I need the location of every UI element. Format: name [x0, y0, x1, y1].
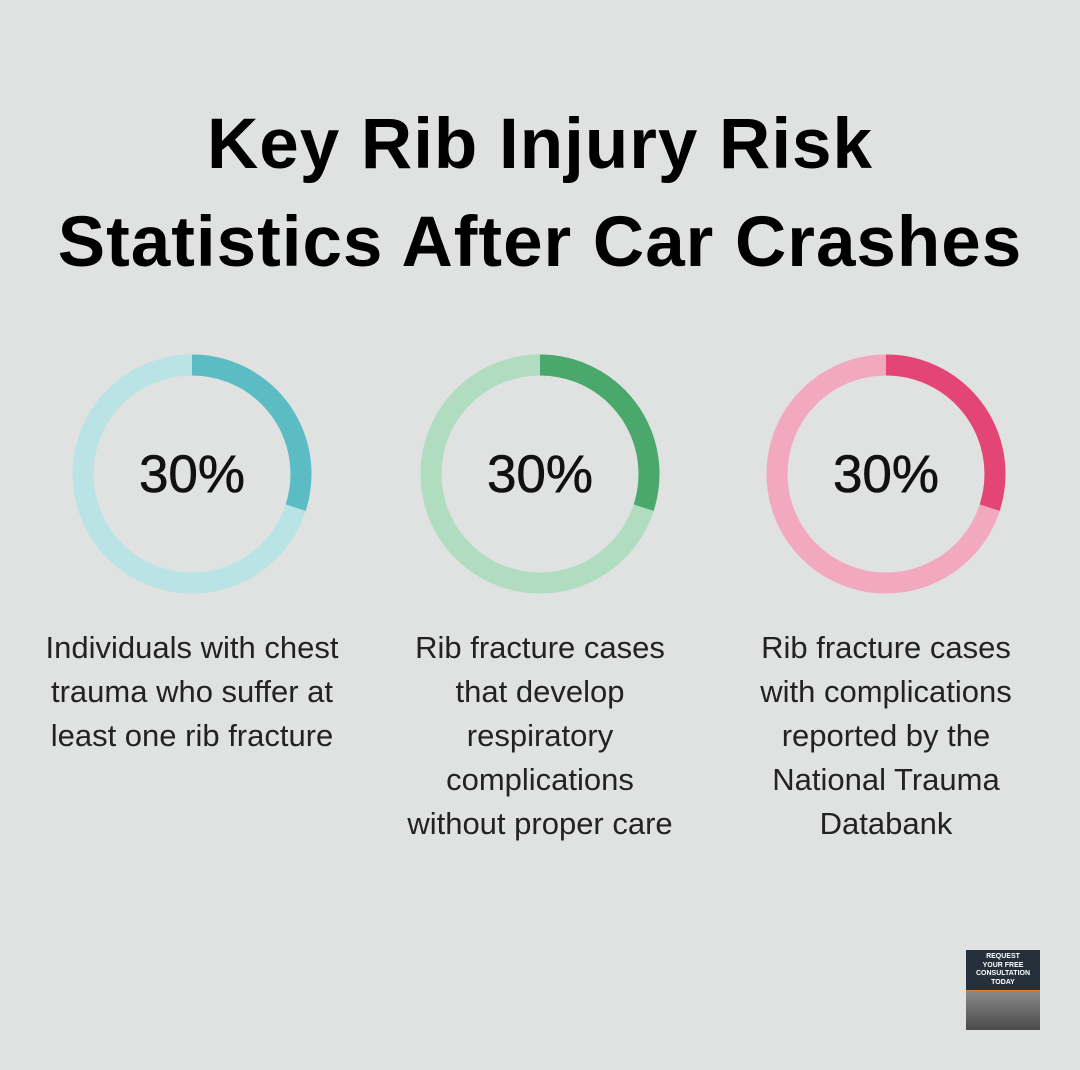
caption 2: without proper care — [407, 806, 673, 841]
caption 2: complications — [446, 762, 634, 797]
caption 2: respiratory — [467, 718, 613, 753]
caption 1 — [46, 630, 338, 753]
caption 3 — [760, 630, 1012, 841]
donut 1 — [72, 354, 312, 594]
value 2: 30% — [487, 445, 593, 504]
panel: stat 2 — [407, 354, 673, 841]
title: Statistics After Car Crashes — [58, 203, 1022, 282]
caption 1: least one rib fracture — [51, 718, 333, 753]
value 1: 30% — [139, 445, 245, 504]
value 3: 30% — [833, 445, 939, 504]
title: Key Rib Injury Risk — [207, 105, 873, 184]
badge: consultation: YOUR FREE — [983, 962, 1023, 968]
badge: consultation: CONSULTATION — [976, 970, 1030, 977]
caption 3: with complications — [760, 674, 1012, 709]
panel: stat 1 — [46, 354, 338, 753]
caption 1: Individuals with chest — [46, 630, 338, 665]
caption 2: that develop — [456, 674, 624, 709]
caption 2 — [407, 630, 673, 841]
donut 2 — [420, 354, 660, 594]
badge: consultation — [966, 950, 1040, 1030]
caption 3: Rib fracture cases — [761, 630, 1011, 665]
panel: stat 3 — [760, 354, 1012, 841]
caption 3: reported by the — [782, 718, 990, 753]
caption 3: Databank — [820, 806, 952, 841]
badge: consultation: TODAY — [991, 978, 1015, 986]
donut 3 — [766, 354, 1006, 594]
caption 2: Rib fracture cases — [415, 630, 665, 665]
badge: consultation: REQUEST — [986, 953, 1020, 960]
caption 3: National Trauma — [772, 762, 1000, 797]
caption 1: trauma who suffer at — [51, 674, 333, 709]
title — [58, 105, 1022, 282]
